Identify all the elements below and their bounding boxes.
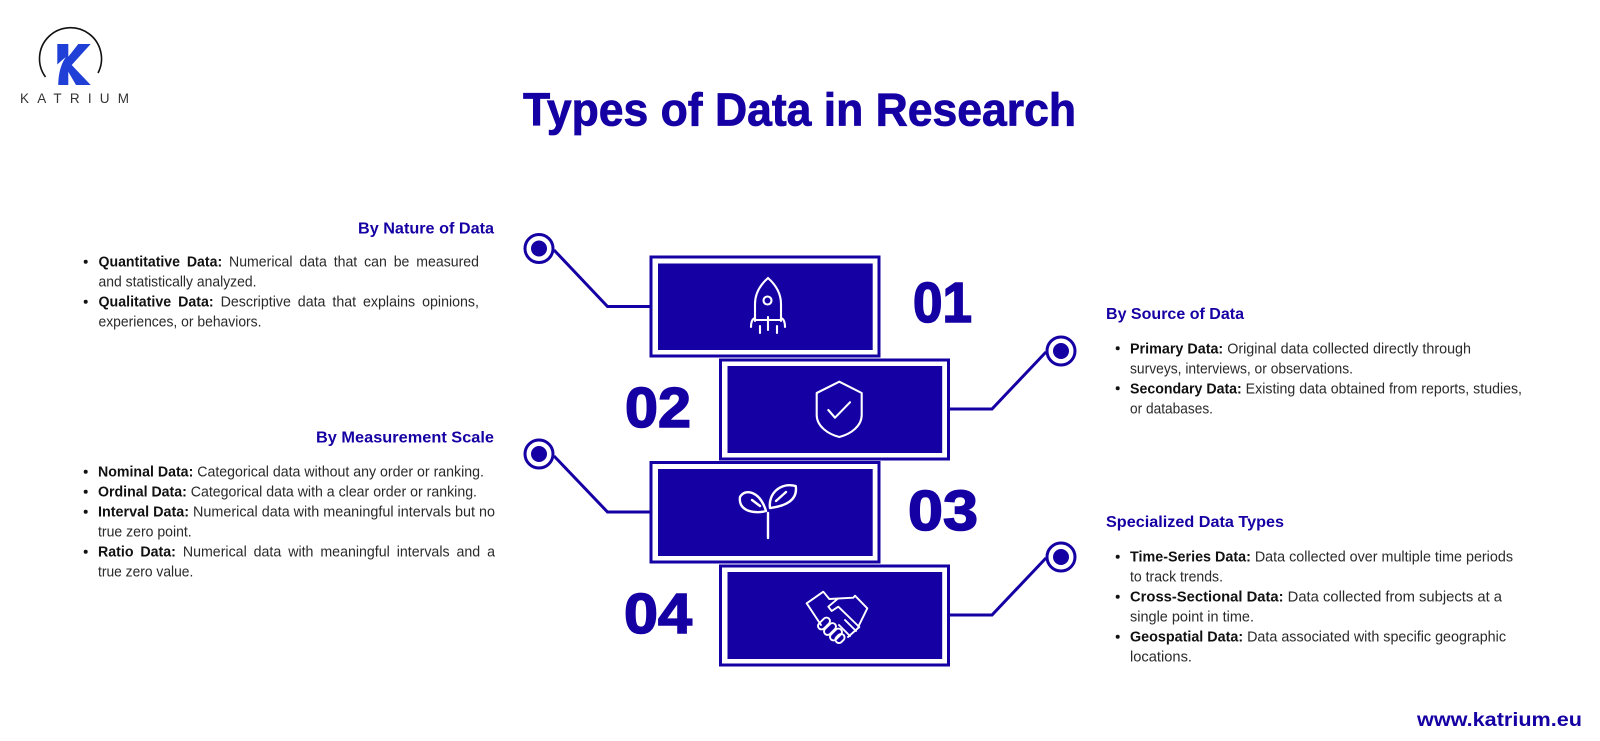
connector 4 [950,543,1075,615]
card 1: rocket [651,257,879,356]
connector 1 [525,234,650,306]
bullet list: source [1116,341,1522,417]
title: Types of Data in Research [523,84,1076,136]
bullet list: source: surveys, interviews, or observations. [1130,361,1353,377]
number 01: 01 [913,271,972,335]
heading: by nature of data: By Nature of Data [358,220,494,238]
bullet list: source: Primary Data: Original data collected directly through [1130,341,1471,357]
bullet list: nature: Quantitative Data: Numerical data that can be measured [98,255,479,271]
bullet list: specialized: single point in time. [1130,610,1254,626]
bullet list: specialized [1116,550,1513,666]
number 04: 04 [624,582,692,646]
card 4: handshake [720,566,948,665]
bullet list: measurement: true zero point. [98,525,192,541]
bullet list: specialized: Geospatial Data: Data associated with specific geographic [1130,630,1506,646]
panel: by measurement scale [84,429,495,581]
icon: shield [817,382,862,437]
heading: by measurement scale: By Measurement Scale [316,429,494,446]
bullet list: measurement: Interval Data: Numerical data with meaningful intervals but no [98,505,495,521]
card 3: sprout [651,462,879,562]
bullet list: source: or databases. [1130,401,1213,417]
bullet list: specialized: to track trends. [1130,570,1223,586]
bullet list: measurement: true zero value. [98,565,193,581]
card 2: shield [720,360,948,459]
bullet list: nature: and statistically analyzed. [98,275,256,291]
bullet list: measurement: Nominal Data: Categorical data without any order or ranking. [98,465,484,481]
bullet list: measurement: Ordinal Data: Categorical data with a clear order or ranking. [98,485,477,501]
bullet list: specialized: Cross-Sectional Data: Data collected from subjects at a [1130,590,1502,606]
logo: Katrium: KATRIUM [20,91,129,106]
connector 2 [950,337,1075,409]
panel: specialized data types [1106,514,1513,666]
bullet list: nature [84,255,479,331]
connector 3 [525,440,650,512]
bullet list: specialized: Time-Series Data: Data collected over multiple time periods [1130,550,1513,566]
icon: sprout [740,485,796,538]
bullet list: source: Secondary Data: Existing data obtained from reports, studies, [1130,381,1522,397]
bullet list: specialized: locations. [1130,650,1192,666]
panel: by nature of data [84,220,494,331]
heading: specialized data types: Specialized Data Types [1106,514,1284,531]
panel: by source of data [1106,306,1522,417]
heading: by source of data: By Source of Data [1106,306,1244,323]
bullet list: measurement: Ratio Data: Numerical data with meaningful intervals and a [98,545,495,561]
bullet list: nature: Qualitative Data: Descriptive data that explains opinions, [98,295,479,311]
bullet list: nature: experiences, or behaviors. [98,315,262,331]
icon: handshake [807,592,867,645]
icon: rocket [751,278,785,333]
website url: www.katrium.eu [1416,710,1582,731]
logo: Katrium [20,28,129,106]
number 03: 03 [908,479,978,543]
bullet list: measurement [84,465,495,581]
number 02: 02 [625,376,691,440]
